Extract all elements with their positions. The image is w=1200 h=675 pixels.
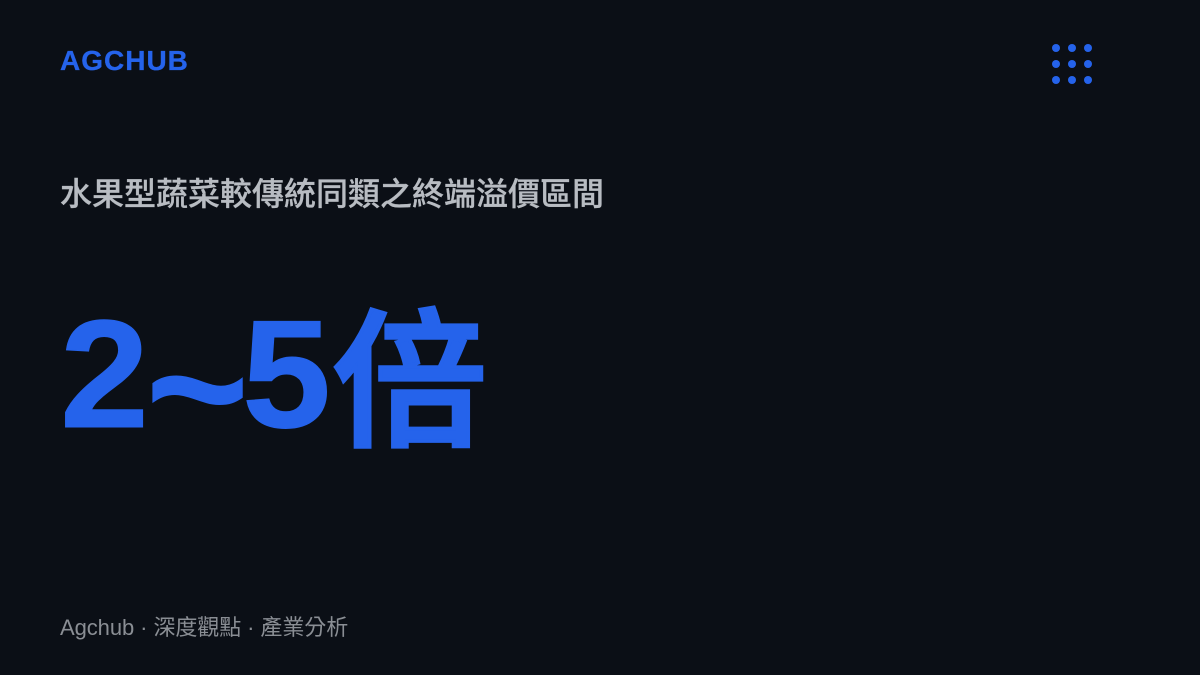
big number: 2~5 times: 5	[242, 288, 331, 460]
big number: 2~5 times	[60, 287, 487, 488]
big number: 2~5 times: ~	[146, 287, 249, 488]
big number: 2~5 times: 倍	[332, 300, 487, 466]
big number: 2~5 times: 2	[60, 288, 149, 460]
brand logo: AGCHUB: AGCHUB	[60, 45, 189, 76]
icon: dot grid	[1052, 44, 1092, 84]
footer text: Agchub · 深度觀點 · 產業分析	[60, 615, 348, 640]
subtitle heading: 水果型蔬菜較傳統同類之終端溢價區間	[60, 176, 604, 212]
